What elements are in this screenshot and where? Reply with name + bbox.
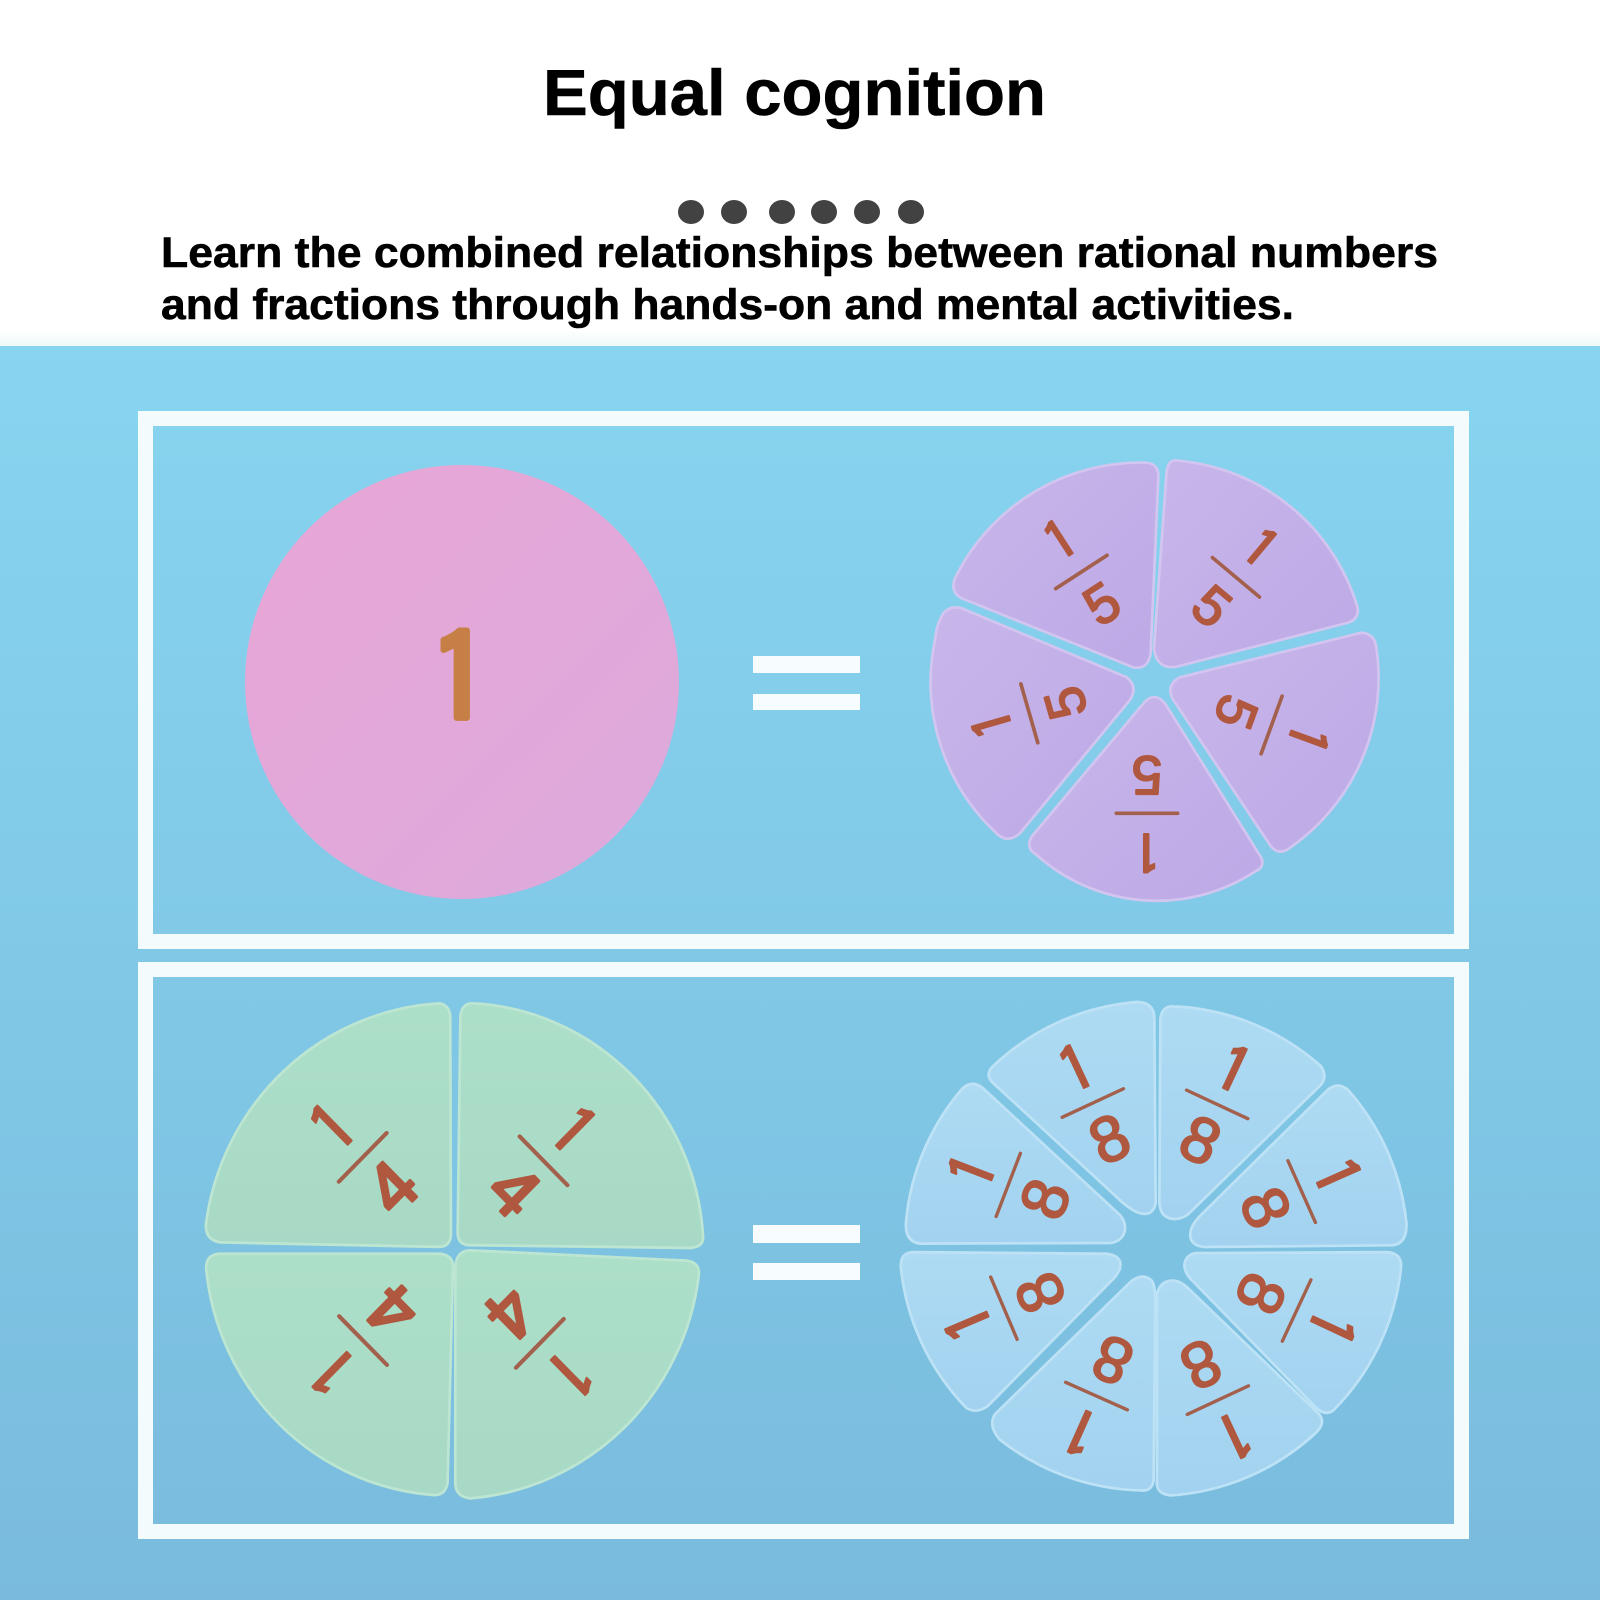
piece: eighth 5: 8 xyxy=(1170,1324,1233,1404)
piece: eighth 5: 1 xyxy=(1206,1399,1262,1471)
green circle of four 1/4 pieces xyxy=(206,1003,703,1498)
piece: bottom left quarter xyxy=(206,1254,453,1495)
description text: and fractions through hands-on and mental activities. xyxy=(161,281,1294,329)
piece: eighth 8: 8 xyxy=(1005,1169,1085,1229)
piece: eighth 4 xyxy=(1184,1248,1401,1413)
piece: top right fifth xyxy=(1154,460,1358,667)
title: Equal cognition xyxy=(543,56,1046,129)
piece: eighth 7: 1 xyxy=(932,1296,1004,1351)
piece: eighth 7 xyxy=(901,1248,1120,1411)
pink whole circle xyxy=(245,465,679,899)
panel frame bottom xyxy=(146,970,1462,1532)
piece: bottom fifth: 5 xyxy=(1132,745,1162,807)
piece: top right fifth: 5 xyxy=(1180,573,1243,640)
piece: right fifth: 1 xyxy=(1277,716,1338,760)
panel: whole equals fifths xyxy=(146,418,1462,942)
piece: bottom left quarter: 4 xyxy=(351,1269,433,1352)
piece: eighth 4: 1 xyxy=(1295,1299,1368,1355)
dot row xyxy=(678,200,924,224)
blue circle of eight 1/8 pieces xyxy=(901,1002,1406,1495)
piece: eighth 3: 8 xyxy=(1225,1177,1306,1239)
piece: top right quarter xyxy=(458,1003,703,1248)
piece: bottom right quarter xyxy=(455,1250,699,1498)
piece: top left fifth: 1 xyxy=(1034,509,1087,571)
piece: eighth 1: 1 xyxy=(1048,1032,1105,1104)
piece: left fifth: 5 xyxy=(1032,680,1100,726)
equals sign top xyxy=(753,656,860,710)
piece: eighth 8 xyxy=(906,1084,1125,1244)
piece: right fifth: 5 xyxy=(1202,687,1271,737)
purple circle of five 1/5 pieces xyxy=(931,460,1379,901)
piece: eighth 1: 8 xyxy=(1078,1099,1141,1179)
piece: top right fifth: 1 xyxy=(1232,518,1289,578)
panel frame top xyxy=(146,418,1462,942)
piece: top left quarter: 1 xyxy=(297,1090,370,1165)
header fade band xyxy=(0,330,1600,347)
piece: eighth 5 xyxy=(1155,1281,1322,1495)
piece: top right quarter: 4 xyxy=(473,1149,555,1232)
piece: eighth 8: 1 xyxy=(936,1144,1008,1198)
piece: bottom fifth: 1 xyxy=(1133,824,1161,879)
piece: left fifth: 1 xyxy=(962,703,1023,745)
piece: eighth 6 xyxy=(992,1277,1158,1491)
piece: eighth 3 xyxy=(1190,1086,1406,1253)
piece: eighth 4: 8 xyxy=(1221,1262,1301,1325)
description text: Learn the combined relationships between rational numbers xyxy=(161,229,1438,277)
piece: bottom right quarter: 1 xyxy=(533,1336,606,1411)
piece: eighth 7: 8 xyxy=(1000,1262,1080,1323)
pink whole circle: 1 xyxy=(429,615,491,740)
piece: top left quarter xyxy=(206,1003,451,1247)
piece: eighth 6: 1 xyxy=(1053,1395,1109,1468)
piece: eighth 2: 1 xyxy=(1205,1033,1262,1106)
piece: eighth 1 xyxy=(989,1002,1156,1214)
piece: bottom right quarter: 4 xyxy=(470,1272,551,1355)
piece: top left quarter: 4 xyxy=(351,1146,433,1229)
piece: top left fifth: 5 xyxy=(1072,569,1132,638)
blue background xyxy=(0,346,1600,1600)
piece: left fifth xyxy=(931,607,1133,839)
description text xyxy=(161,229,1438,329)
equals sign bottom xyxy=(753,1225,860,1280)
piece: top left fifth xyxy=(953,463,1158,668)
piece: right fifth xyxy=(1170,633,1379,852)
piece: eighth 2: 8 xyxy=(1169,1100,1232,1180)
piece: eighth 6: 8 xyxy=(1082,1320,1144,1400)
piece: bottom fifth xyxy=(1029,697,1262,901)
piece: eighth 2 xyxy=(1155,1006,1324,1219)
piece: top right quarter: 1 xyxy=(536,1093,610,1168)
piece: eighth 3: 1 xyxy=(1301,1148,1373,1204)
panel: quarters equal eighths xyxy=(146,970,1462,1532)
piece: bottom left quarter: 1 xyxy=(297,1333,370,1408)
